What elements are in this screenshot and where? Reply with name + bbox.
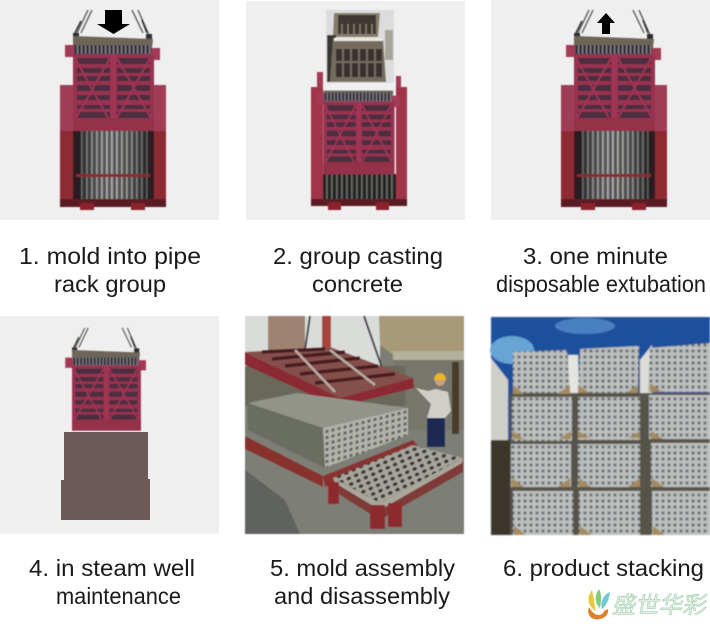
icon: down arrow [97,10,130,34]
machine: mold rack extubating [561,10,667,210]
caption: step 1: rack group [54,271,166,297]
stacked crates column 3 [648,343,710,535]
caption: step 2 [273,243,443,297]
logo [588,589,710,619]
logo: 盛世华彩 [611,592,710,618]
crate corner brackets [512,383,665,535]
caption: step 5: and disassembly [274,583,450,609]
caption: step 6: 6. product stacking [503,555,704,581]
panel: step 1 mold into pipe rack group [0,0,219,220]
stacked crates column 1 [511,350,573,535]
caption: step 4: maintenance [56,583,181,609]
top mold plate [245,347,414,407]
caption: step 3: 3. one minute [523,243,668,269]
caption: step 1: 1. mold into pipe [19,243,201,269]
caption: step 4: 4. in steam well [29,555,195,581]
caption: step 1 [19,243,201,297]
panel: step 3 one minute disposable extubation [491,0,710,220]
panel: step 4 steam well maintenance [0,316,219,534]
steam well block [61,432,150,520]
caption: step 3 [496,243,706,297]
panel: step 6 product stacking photo [490,317,710,535]
caption: step 2: 2. group casting [273,243,443,269]
panel: step 2 group casting concrete [246,1,465,220]
caption: step 5: 5. mold assembly [270,555,455,581]
icon: up arrow [597,13,615,34]
caption: step 2: concrete [312,271,403,297]
concrete block [248,393,408,468]
lifting cables [305,316,388,385]
panel: step 5 mold assembly and disassembly photo [245,316,464,534]
worker with yellow helmet [416,373,451,447]
stacked crates column 2 [578,346,640,535]
caption: step 5 [270,555,455,609]
caption: step 4 [29,555,195,609]
icon: logo leaves [588,589,610,619]
lower mold base [245,436,323,487]
machine: hopper casting into mold [311,10,407,210]
machine: assembled mold rack [60,10,166,210]
machine: mold rack lowered into well [65,328,146,431]
perforated bottom plate [328,445,463,529]
